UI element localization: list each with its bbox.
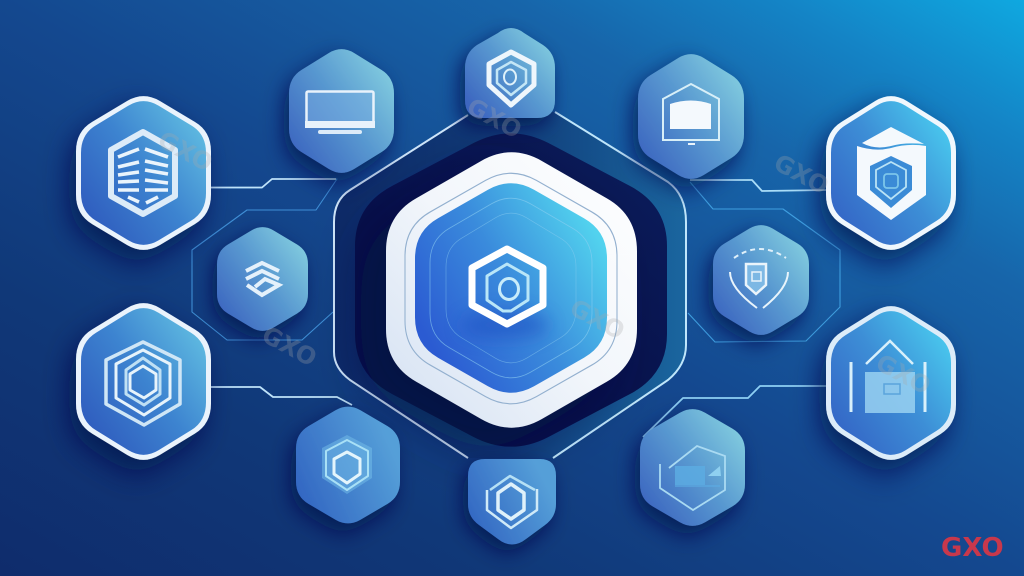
panel: bottom-right medium hexagon [640, 409, 745, 526]
central ring frame [334, 112, 686, 458]
panel: bottom-center hexagon [468, 459, 556, 544]
icon: layered chevrons [246, 263, 279, 295]
watermarks: GXO [871, 349, 935, 400]
icon: concentric hex shield [106, 342, 180, 425]
watermarks: GXO [462, 93, 526, 144]
watermarks: GXO [153, 126, 217, 177]
panel: mid-right hexagon [713, 225, 809, 335]
icon: heart shield [730, 249, 788, 308]
icon: house panel [851, 341, 925, 413]
icon: central hex ring [472, 249, 543, 324]
panel: bottom-left medium hexagon [296, 407, 400, 523]
icon: house monitor [663, 84, 719, 145]
panel: central hexagon [386, 152, 637, 428]
icon: hex rings [487, 476, 537, 528]
icon: monitor [305, 92, 375, 134]
panel: monitor hexagon [289, 49, 394, 173]
panel: top-center hexagon [465, 28, 555, 118]
watermarks: GXO [257, 321, 321, 372]
icon: white shield [857, 127, 926, 220]
panel: top-right medium hexagon [638, 54, 744, 179]
icon: outlined shield with blocks [660, 446, 725, 510]
watermarks [153, 93, 935, 400]
watermarks: GXO [769, 149, 833, 200]
panel: bottom-left large hexagon [76, 303, 211, 460]
panel: bottom-right large hexagon [826, 306, 956, 460]
connector lines [192, 179, 840, 437]
icon: glowing shield [322, 435, 372, 494]
panel: mid-left hexagon [217, 227, 308, 331]
watermarks: GXO [565, 294, 629, 345]
icon: shield with drop [489, 52, 534, 105]
panel: top-right large hexagon [826, 96, 956, 250]
panel: top-left large hexagon [76, 96, 211, 250]
icon: striped shield [111, 132, 175, 214]
brand mark: GXO [941, 533, 1004, 563]
